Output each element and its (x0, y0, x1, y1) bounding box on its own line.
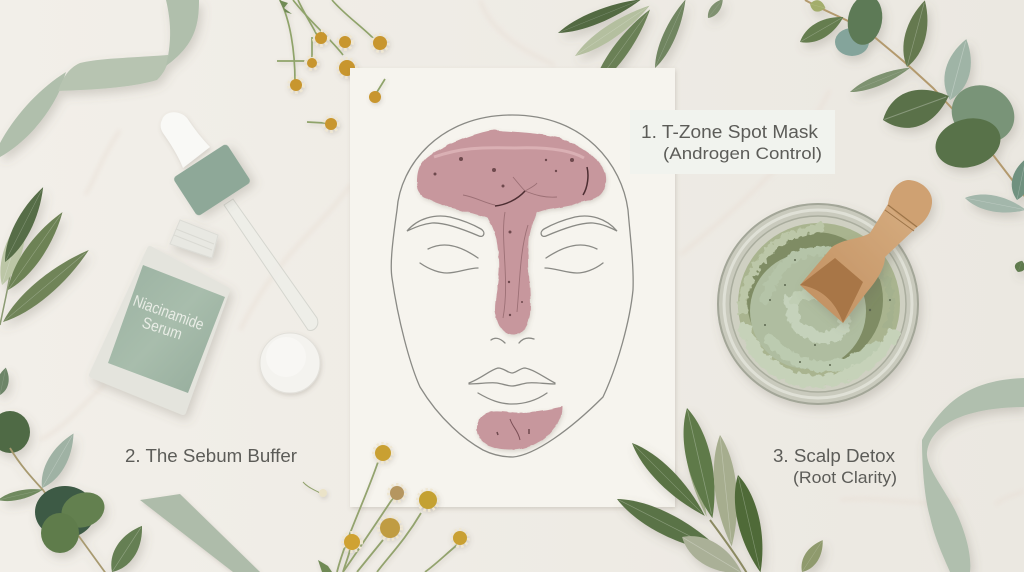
sprig: bottom left eucalyptus (0, 366, 151, 572)
right eyebrow (541, 216, 617, 236)
clay mask: chin (477, 407, 562, 450)
nose (491, 338, 534, 343)
olive leaves: bottom centre (612, 405, 829, 572)
ribbon: bottom left (140, 494, 260, 572)
panel: paper sheet (350, 68, 675, 507)
product: serum bottle (92, 220, 227, 412)
sage collar (173, 143, 251, 217)
dropper pipette (224, 199, 318, 330)
product: serum droplet (260, 333, 320, 393)
callout: T-zone spot mask (630, 110, 835, 174)
scrub (738, 223, 900, 385)
caption: sebum buffer: 2. The Sebum Buffer (125, 445, 297, 466)
callout: T-zone spot mask: (Androgen Control) (663, 144, 822, 163)
left eyebrow (407, 216, 484, 236)
product: scrub jar (717, 180, 932, 405)
caption: scalp detox: (Root Clarity) (793, 468, 897, 487)
face outline diagram (391, 115, 633, 457)
face contour (391, 115, 633, 457)
bottle label (108, 265, 225, 393)
ribbon: right (922, 378, 1024, 572)
rubber bulb (161, 112, 210, 168)
bottle text: Niacinamide (131, 293, 206, 334)
caption: scalp detox (773, 445, 897, 487)
flowers: bottom chamomile sprigs (303, 445, 467, 572)
ribbon: top left (0, 0, 199, 157)
flower: small chamomile on paper (369, 79, 385, 103)
sprig: left olive leaves (0, 183, 95, 329)
callout: T-zone spot mask: 1. T-Zone Spot Mask (641, 121, 819, 142)
lips (469, 368, 555, 404)
flowers: top chamomile sprigs (277, 0, 387, 130)
wooden scoop (800, 180, 932, 323)
product: dropper (161, 112, 318, 330)
left eye (420, 245, 478, 273)
bottle neck (170, 220, 218, 258)
bottle body (92, 249, 227, 412)
product: serum bottle: Serum (140, 315, 184, 343)
clay mask: T-zone (417, 130, 606, 335)
sprig: top right eucalyptus (796, 0, 1024, 274)
olive leaves: top centre (556, 0, 726, 92)
bottle ring lines (174, 229, 214, 250)
jar glass (717, 203, 919, 405)
caption: scalp detox: 3. Scalp Detox (773, 445, 896, 466)
right eye (545, 245, 603, 273)
